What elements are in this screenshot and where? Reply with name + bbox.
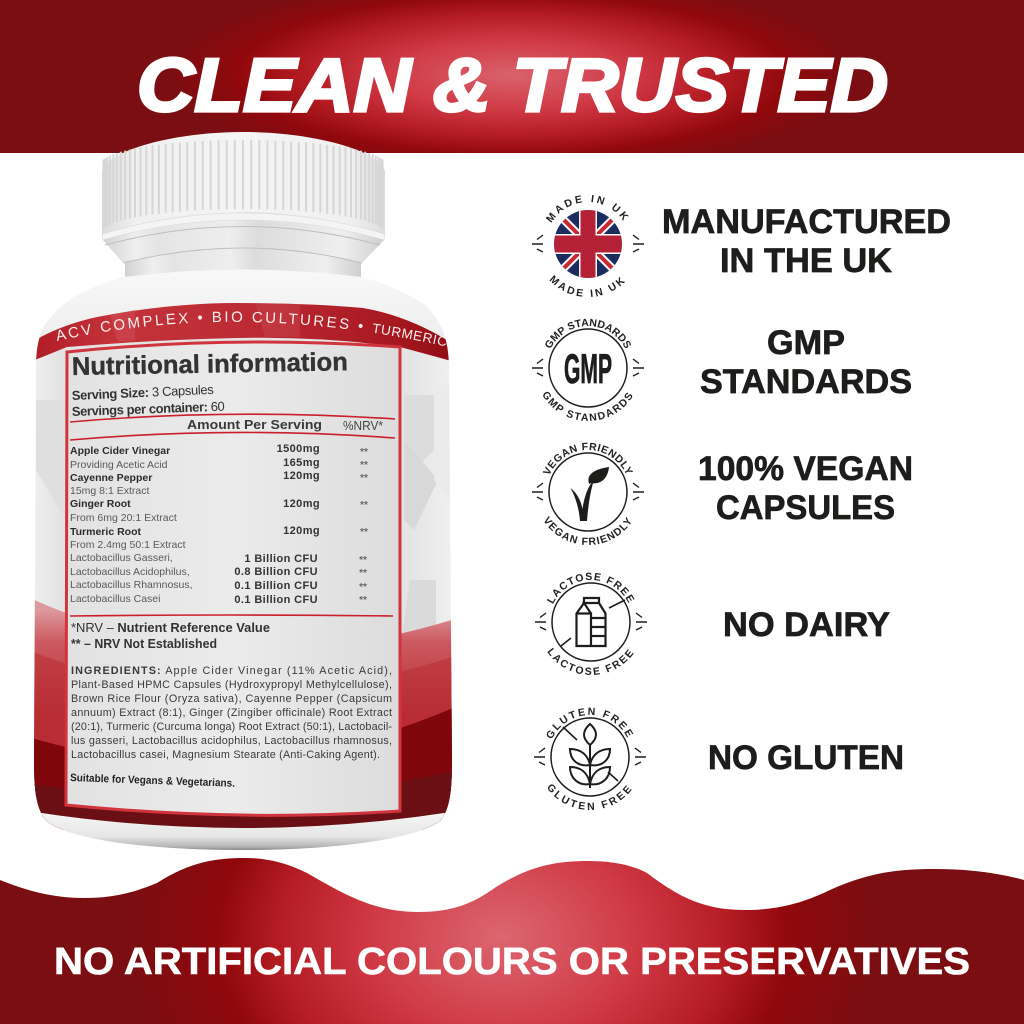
label: no gluten: NO GLUTEN <box>708 739 904 777</box>
nutrition rows: ** <box>359 555 367 566</box>
ingredients <box>71 665 392 761</box>
table header: %NRV* <box>343 419 383 433</box>
badge: made in UK <box>532 194 644 297</box>
label: GMP standards <box>700 324 912 401</box>
badge: vegan friendly: VEGAN FRIENDLY <box>544 516 631 545</box>
badge: GMP standards <box>532 318 644 421</box>
nutrition rows: ** <box>360 500 368 511</box>
nutrition rows: Providing Acetic Acid <box>70 459 168 471</box>
ingredients: Brown Rice Flour (Oryza sativa), Cayenne Pepper (Capsicum <box>71 693 392 705</box>
label: vegan capsules: CAPSULES <box>716 489 895 527</box>
NRV notes: ** – NRV Not Established <box>71 637 217 651</box>
nutrition rows: Lactobacillus Acidophilus, <box>70 566 190 578</box>
nutrition rows: From 6mg 20:1 Extract <box>70 512 177 524</box>
nutrition rows: ** <box>359 595 367 606</box>
serving info: Servings per container: 60 <box>72 399 225 419</box>
table header: Amount Per Serving <box>187 417 322 432</box>
bottom banner text: NO ARTIFICIAL COLOURS OR PRESERVATIVES <box>54 941 970 983</box>
icon: wheat <box>570 724 610 788</box>
bottle <box>34 132 452 850</box>
bottle base <box>41 812 446 850</box>
shoulder red band <box>30 303 455 362</box>
pink swoosh <box>28 597 458 830</box>
nutrition rows: ** <box>359 582 367 593</box>
badge: vegan friendly: VEGAN FRIENDLY <box>542 442 633 474</box>
ingredients: lus gasseri, Lactobacillus acidophilus, Lactobacillus rhamnosus, <box>71 735 392 747</box>
badge: made in UK: MADE IN UK <box>546 194 629 223</box>
nutrition rows: 120mg <box>283 470 320 482</box>
dark red swoosh <box>28 706 458 830</box>
nutrition rows: Lactobacillus Rhamnosus, <box>70 579 193 591</box>
badge: GMP standards: GMP STANDARDS <box>543 392 632 421</box>
label: vegan capsules <box>698 450 913 527</box>
label <box>66 342 400 815</box>
bottle body <box>28 260 460 860</box>
nutrition rows: Ginger Root <box>70 498 131 510</box>
ingredients: annuum) Extract (8:1), Ginger (Zingiber officinale) Root Extract <box>71 707 392 719</box>
badge: made in UK: MADE IN UK <box>550 275 626 297</box>
label: no dairy: NO DAIRY <box>723 606 890 644</box>
cap <box>102 132 385 234</box>
icon: union jack flag <box>553 209 623 279</box>
bottle neck <box>125 225 361 282</box>
nutrition rows: Lactobacillus Casei <box>70 593 160 605</box>
icon: GMP text: GMP <box>564 345 612 392</box>
nutrition rows: Turmeric Root <box>70 526 141 538</box>
nutrition rows: 120mg <box>283 498 320 510</box>
nutrition rows: Lactobacillus Gasseri, <box>70 552 173 564</box>
label: manufactured in the UK <box>662 203 951 280</box>
badge: vegan friendly <box>532 442 644 545</box>
ingredients: INGREDIENTS: Apple Cider Vinegar (11% Acetic Acid), <box>71 665 392 677</box>
label: GMP standards: GMP <box>767 324 845 362</box>
top banner <box>0 0 1024 153</box>
nutrition rows: ** <box>360 460 368 471</box>
icon: milk carton <box>576 598 606 646</box>
nutrition rows: 0.8 Billion CFU <box>234 566 318 578</box>
nutrition rows: ** <box>360 447 368 458</box>
ingredients: Plant-Based HPMC Capsules (Hydroxypropyl Methylcellulose), <box>71 679 392 691</box>
bottom wave banner <box>0 858 1024 1024</box>
NRV notes: *NRV – Nutrient Reference Value <box>71 621 270 635</box>
label: manufactured in the UK: MANUFACTURED <box>662 203 951 241</box>
table header <box>187 417 383 433</box>
badge: gluten free <box>534 708 646 810</box>
badge: gluten free: GLUTEN FREE <box>548 784 632 810</box>
cap ridges <box>104 140 382 228</box>
nutrition rows: 1500mg <box>277 443 320 455</box>
nutrition rows: 0.1 Billion CFU <box>234 580 318 592</box>
serving info: Serving Size: 3 Capsules <box>71 382 214 403</box>
badge: lactose free: LACTOSE FREE <box>547 648 634 675</box>
nutrition rows <box>70 443 368 606</box>
bottle shoulder <box>49 270 430 331</box>
nutrition rows: ** <box>360 527 368 538</box>
serving info <box>71 382 225 419</box>
nutrition rows: ** <box>360 473 368 484</box>
nutrition rows: From 2.4mg 50:1 Extract <box>70 539 186 551</box>
label heading: Nutritional information <box>72 348 348 381</box>
badge: lactose free: LACTOSE FREE <box>546 572 634 604</box>
ingredients: (20:1), Turmeric (Curcuma longa) Root Extract (50:1), Lactobacil- <box>71 721 392 733</box>
ingredients: Lactobacillus casei, Magnesium Stearate (Anti-Caking Agent). <box>71 749 380 761</box>
nutrition rows: 0.1 Billion CFU <box>234 594 318 606</box>
nutrition rows: 165mg <box>283 457 320 469</box>
title: CLEAN & TRUSTED <box>137 43 888 127</box>
nutrition rows: ** <box>359 568 367 579</box>
label: GMP standards: STANDARDS <box>700 363 912 401</box>
badge: gluten free: GLUTEN FREE <box>546 708 634 738</box>
NRV notes <box>71 621 270 651</box>
nutrition rows: Apple Cider Vinegar <box>70 445 170 457</box>
badge: GMP standards: GMP STANDARDS <box>545 318 631 348</box>
suitability note: Suitable for Vegans & Vegetarians. <box>70 772 235 790</box>
icon: leaf check <box>570 467 609 521</box>
nutrition rows: 120mg <box>283 525 320 537</box>
cap underside <box>102 211 385 263</box>
label: manufactured in the UK: IN THE UK <box>720 242 892 280</box>
table rules <box>70 414 395 616</box>
nutrition rows: 15mg 8:1 Extract <box>70 485 149 497</box>
badge: lactose free <box>535 572 647 675</box>
nutrition rows: Cayenne Pepper <box>70 472 152 484</box>
label: vegan capsules: 100% VEGAN <box>698 450 913 488</box>
nutrition rows: 1 Billion CFU <box>244 553 318 565</box>
